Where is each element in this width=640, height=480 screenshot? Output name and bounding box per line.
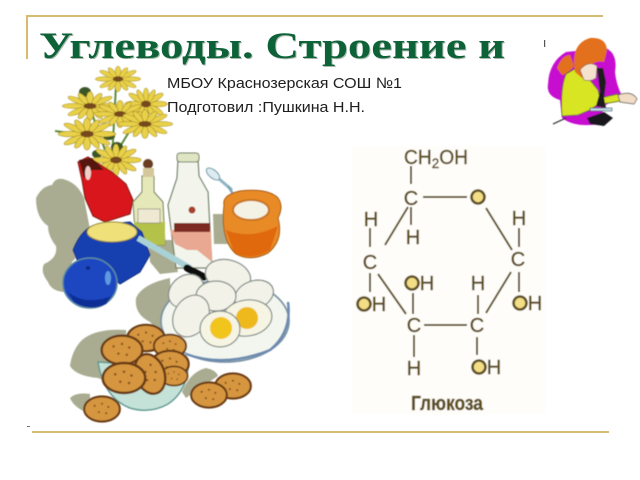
atom labels: H bbox=[420, 273, 434, 295]
milk bottle bbox=[168, 153, 212, 268]
small tick mark bbox=[544, 40, 545, 47]
sliced eggs bbox=[200, 297, 274, 347]
honey pot bbox=[223, 190, 281, 258]
title: Углеводы. Строение и bbox=[40, 27, 506, 68]
atom labels: 2 bbox=[432, 155, 439, 171]
icon: girl with microscope bbox=[548, 38, 637, 126]
plate with eggs bbox=[161, 255, 289, 362]
atom labels: H bbox=[406, 227, 420, 249]
food picture backdrop bbox=[28, 59, 168, 119]
spoon bbox=[204, 166, 240, 205]
atom labels: C bbox=[363, 252, 377, 274]
atom labels: H bbox=[364, 209, 378, 231]
atom labels: CH bbox=[404, 147, 433, 169]
blue butter dish bbox=[73, 222, 204, 284]
subtitle text: Подготовил :Пушкина Н.Н. bbox=[167, 99, 365, 116]
atom labels: OH bbox=[439, 147, 468, 169]
atom labels: C bbox=[470, 315, 484, 337]
atom labels: C bbox=[407, 315, 421, 337]
title: Углеводы. Строение и bbox=[39, 26, 505, 67]
blue teapot bbox=[63, 258, 117, 308]
stems bbox=[55, 85, 146, 160]
atom labels: H bbox=[528, 293, 542, 315]
atom labels: H bbox=[372, 294, 386, 316]
atom labels: H bbox=[487, 357, 501, 379]
subtitle text bbox=[167, 75, 402, 116]
caption: Глюкоза bbox=[411, 393, 484, 415]
loose cookies bbox=[84, 373, 251, 422]
atom labels bbox=[358, 147, 542, 380]
atom labels: H bbox=[471, 273, 485, 295]
bonds bbox=[370, 166, 519, 357]
atom labels: C bbox=[511, 249, 525, 271]
illustration: food still life bbox=[36, 66, 289, 422]
flowers bbox=[55, 66, 173, 176]
cookies in glass bowl bbox=[98, 325, 189, 410]
oil bottle bbox=[133, 159, 165, 245]
atom labels: H bbox=[407, 358, 421, 380]
red jug bbox=[78, 157, 133, 222]
atom labels: H bbox=[512, 208, 526, 230]
paper background bbox=[352, 146, 546, 414]
diagram: glucose structural formula bbox=[352, 146, 546, 415]
subtitle text: МБОУ Краснозерская СОШ №1 bbox=[167, 75, 402, 92]
grey-green shadows bbox=[36, 179, 228, 414]
atom labels: C bbox=[404, 188, 418, 210]
frame: gold border lines bbox=[26, 15, 609, 433]
